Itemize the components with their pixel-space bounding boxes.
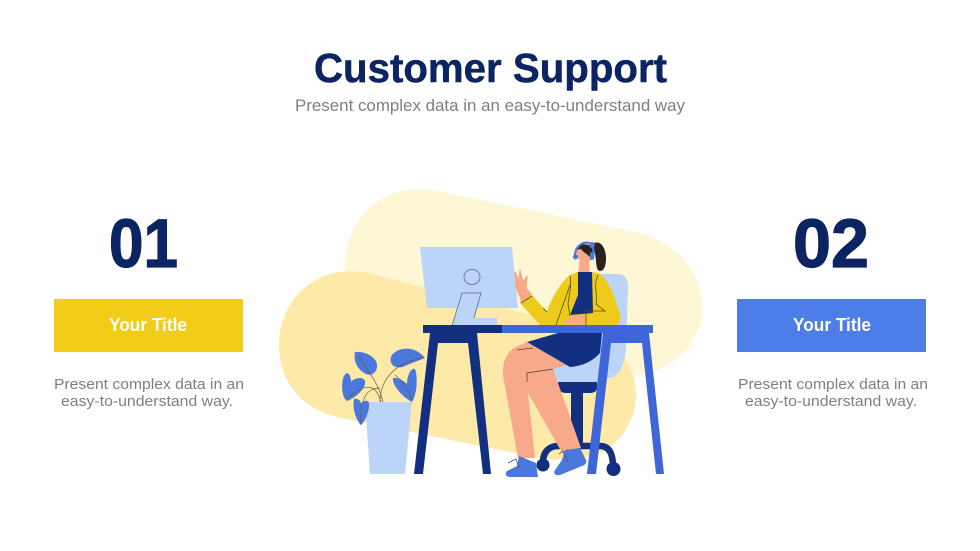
yellow title box — [54, 299, 243, 352]
yellow title box: Your Title — [109, 315, 187, 335]
description 02: easy-to-understand way. — [745, 393, 917, 410]
subtitle: Present complex data in an easy-to-understand way — [295, 96, 685, 115]
title: Customer Support — [314, 45, 667, 91]
laces — [508, 451, 568, 468]
light background blob — [345, 189, 702, 400]
number 02: 02 — [793, 205, 869, 282]
illustration: customer support agent at desk — [279, 189, 702, 477]
number 01: 01 — [109, 205, 178, 282]
plant stems — [347, 356, 423, 425]
ponytail — [594, 242, 606, 271]
description 01: Present complex data in an — [54, 376, 244, 393]
blue half of desk — [502, 325, 664, 474]
head — [576, 245, 592, 264]
raised hand — [515, 270, 531, 302]
jacket — [520, 272, 620, 325]
right shoe — [554, 448, 586, 475]
neck — [578, 258, 590, 275]
lower legs — [503, 342, 581, 458]
description 01: easy-to-understand way. — [61, 393, 233, 410]
description 02: Present complex data in an — [738, 376, 928, 393]
left shoe — [506, 456, 538, 477]
blue title box — [737, 299, 926, 352]
darker background blob — [279, 271, 636, 460]
monitor — [420, 247, 518, 326]
jacket seams — [521, 275, 605, 325]
plant pot — [365, 402, 412, 474]
skirt — [527, 333, 602, 367]
panel: item 01 — [54, 205, 244, 410]
icon: plant — [342, 349, 425, 474]
desk — [414, 325, 664, 474]
shirt — [568, 272, 594, 316]
agent — [503, 242, 620, 477]
hair — [576, 244, 593, 257]
blue title box: Your Title — [793, 315, 871, 335]
knee lines — [517, 348, 553, 382]
chair — [536, 274, 628, 476]
resting hand — [564, 314, 585, 325]
panel: item 02 — [737, 205, 928, 410]
headset — [575, 243, 594, 258]
navy half of desk — [414, 325, 502, 474]
leaves — [355, 352, 377, 375]
